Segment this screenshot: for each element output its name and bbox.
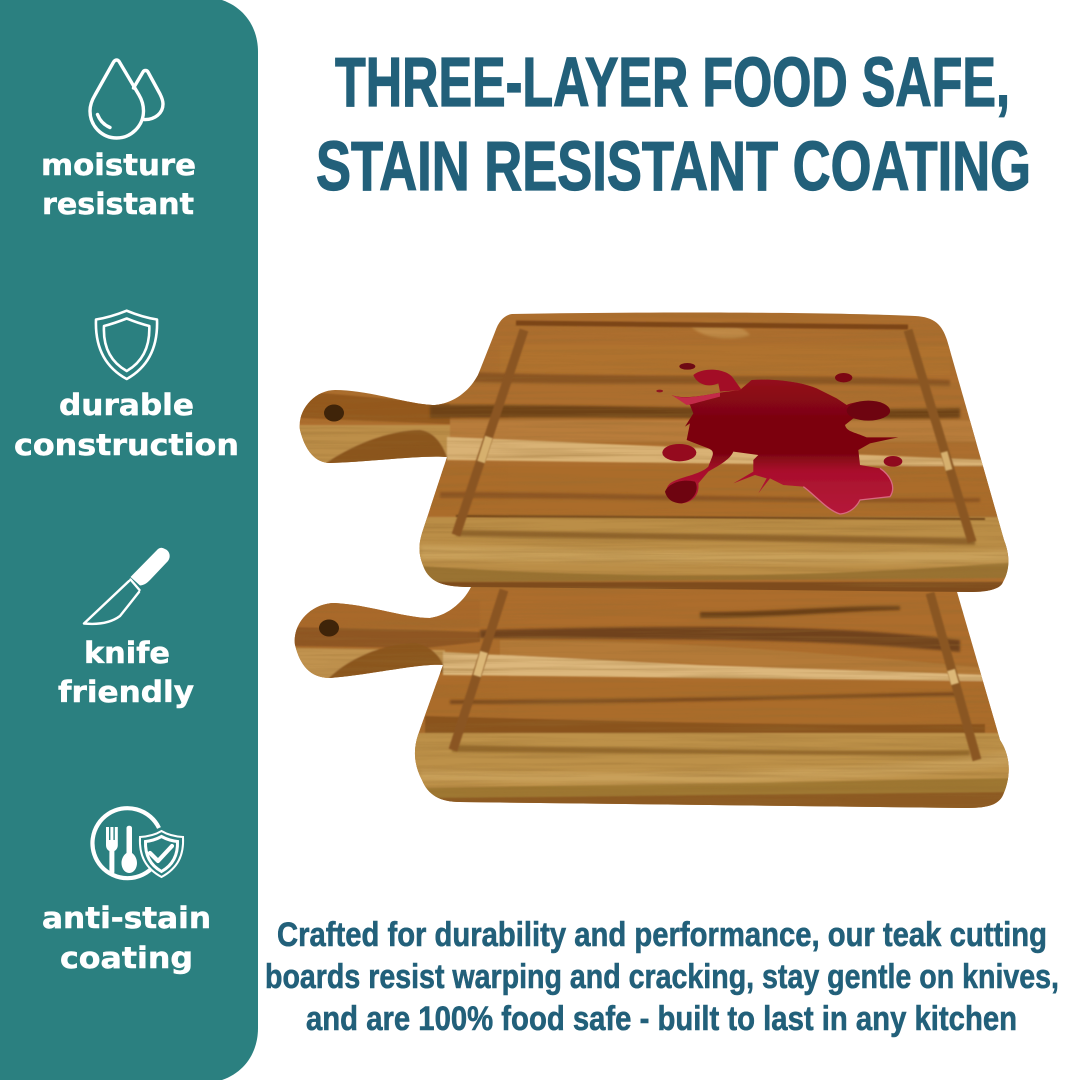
- text: moisture resistant: [41, 148, 196, 221]
- text: anti-stain coating: coating: [60, 941, 193, 975]
- text: moisture resistant: resistant: [42, 187, 194, 221]
- panel: benefits sidebar: [0, 0, 258, 1080]
- text: durable construction: durable: [59, 388, 194, 422]
- icon: water drops: [90, 60, 163, 138]
- title: [316, 43, 1031, 205]
- icon: knife: [84, 548, 170, 624]
- text: knife friendly: friendly: [58, 675, 194, 709]
- lower cutting board: [285, 580, 1020, 815]
- text: anti-stain coating: [42, 901, 211, 975]
- text: knife friendly: knife: [84, 636, 170, 670]
- text: durable construction: construction: [14, 428, 239, 462]
- text: knife friendly: [58, 636, 194, 709]
- text: durable construction: [14, 388, 239, 462]
- hang hole: [324, 404, 344, 422]
- text: moisture resistant: moisture: [41, 148, 196, 182]
- upper cutting board: [290, 305, 1020, 600]
- description text: [265, 916, 1059, 1038]
- icon: cutlery and check shield: [92, 808, 183, 878]
- hang hole: [319, 620, 339, 636]
- text: anti-stain coating: anti-stain: [42, 901, 211, 935]
- icon: shield: [96, 311, 157, 379]
- red stain splash: [656, 363, 902, 514]
